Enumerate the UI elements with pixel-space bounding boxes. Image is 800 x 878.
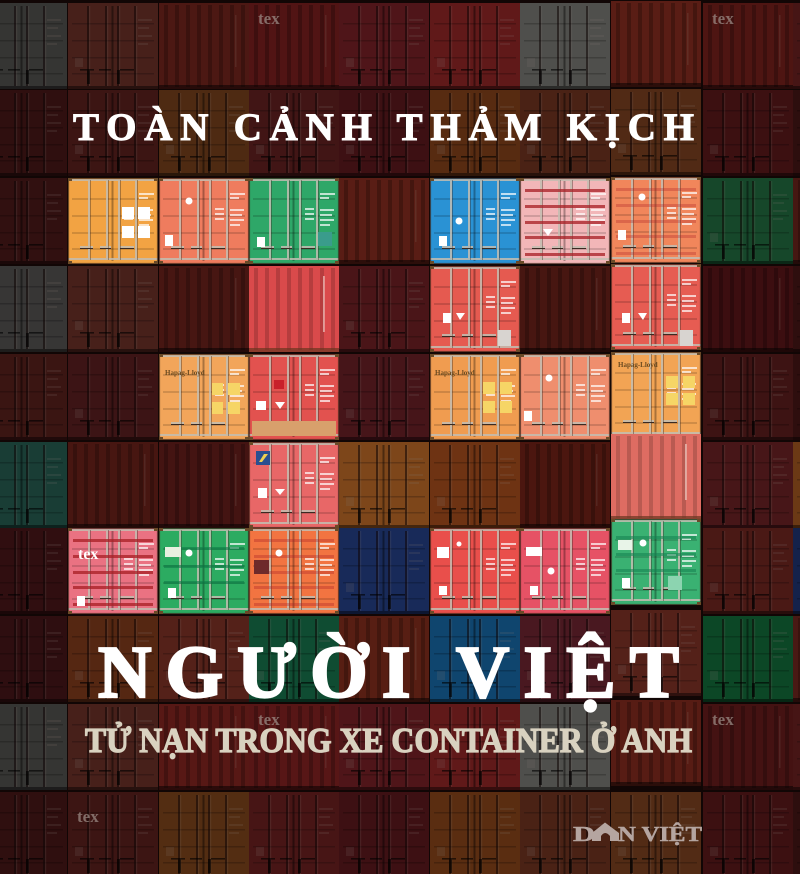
row 3 of dim containers xyxy=(0,178,800,264)
container: top right green xyxy=(249,178,339,264)
container: middle orange right: Hapag-Lloyd xyxy=(618,361,658,369)
container: middle orange left xyxy=(430,354,520,440)
white bottom margin xyxy=(0,874,800,878)
faded container brand marks xyxy=(77,9,734,826)
logo: Dân Việt: N VIỆT xyxy=(618,822,702,846)
container: upper left coral xyxy=(430,266,520,352)
logo: Dân Việt xyxy=(573,822,702,846)
container: lower coral with logo xyxy=(249,442,339,528)
container: middle orange xyxy=(159,354,249,440)
container: bottom left pink: tex xyxy=(78,546,98,563)
row 6 of dim containers xyxy=(0,442,800,528)
container: middle orange left: Hapag-Lloyd xyxy=(435,369,475,377)
row 7 of dim containers xyxy=(0,528,800,614)
numeral 9 built from bright containers xyxy=(430,177,701,614)
container: bottom orange xyxy=(249,528,339,614)
container: middle orange: Hapag-Lloyd xyxy=(165,369,205,377)
container: bottom right green xyxy=(611,519,701,605)
row 2 of dim containers xyxy=(0,89,800,176)
container: top blue xyxy=(430,178,520,264)
row 10 of dim containers xyxy=(0,792,800,878)
row 9 of dim containers xyxy=(0,700,800,790)
faded container brand marks: tex xyxy=(712,710,734,729)
container: top coral xyxy=(159,178,249,264)
container: middle orange right xyxy=(611,352,701,438)
container: top left orange xyxy=(68,178,158,264)
container: bottom left pink xyxy=(68,528,158,614)
icon: house roof forming letter A xyxy=(592,822,619,841)
row 1 of dim containers xyxy=(0,1,800,89)
container: bottom pink red xyxy=(520,528,610,614)
row 4 of dim containers xyxy=(0,266,800,352)
faded container brand marks: tex xyxy=(712,9,734,28)
numeral 3 built from bright containers xyxy=(68,178,339,614)
container: top pink striped xyxy=(520,178,610,264)
container: red corrugated upper xyxy=(249,266,339,352)
container: bottom red xyxy=(430,528,520,614)
faded container brand marks: tex xyxy=(258,9,280,28)
title: subtitle: TỬ NẠN TRONG XE CONTAINER Ở ANH xyxy=(85,720,692,760)
row 8 of dim containers xyxy=(0,610,800,702)
container: upper right coral xyxy=(611,264,701,350)
row 5 of dim containers xyxy=(0,354,800,440)
container: middle coral pale xyxy=(520,354,610,440)
title: top line: TOÀN CẢNH THẢM KỊCH xyxy=(73,105,694,149)
faded container brand marks: tex xyxy=(258,710,280,729)
title: main headline: NGƯỜI VIỆT xyxy=(98,632,679,714)
container: lower corrugated coral xyxy=(611,434,701,520)
faded container brand marks: tex xyxy=(77,807,99,826)
container: bottom green xyxy=(159,528,249,614)
container: middle red xyxy=(249,354,339,440)
logo: Dân Việt: D xyxy=(573,822,595,846)
container: top right orange xyxy=(611,177,701,263)
